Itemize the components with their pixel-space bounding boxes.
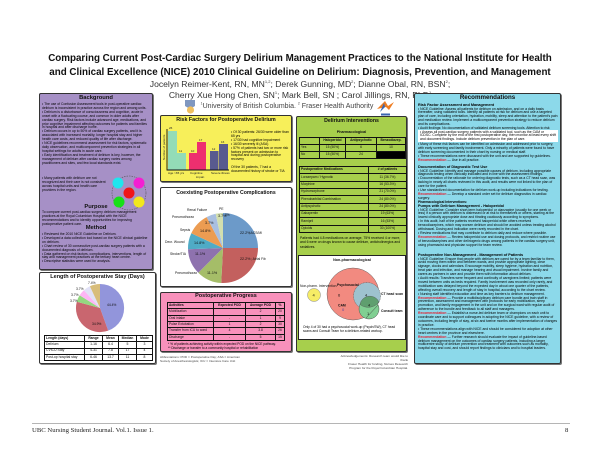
table: postoperative medications: # of patients — [378, 167, 397, 171]
panel: risk factors — [160, 115, 292, 182]
footer rule — [32, 423, 570, 424]
background text: • NICE guidelines recommend assessment for risk factors, systematic daily observation, and multicomponent prevention strategies in all hospital settings for adults in acute care. — [42, 141, 146, 153]
table: pharmacological: 15 (50%) — [326, 145, 339, 149]
panel: length of stay — [39, 272, 156, 364]
pie chart: coexisting complications: 3.7% — [205, 221, 214, 225]
venn note: Only 4 of 30 had a psychosocial work-up (Psych/SW), CT head scans and Consult Team for a delirium-related workup. — [303, 325, 395, 333]
text: assessment findings — [418, 142, 554, 162]
table: pharmacological: No — [301, 152, 305, 156]
text: pharmacological interventions: • In this audit, half of the patients received haloperidol while others received benzodiazepines, which may worsen delirium and should be avoided unless treating alcohol withdrawal. Dosing and indication were rarely recorded in the chart. — [418, 219, 556, 231]
pie chart: coexisting complications: 14.8% — [200, 229, 211, 233]
venn diagram: CAM — [338, 304, 346, 308]
method text: • Data gathered on risk factors, complications, interventions, length of stay and management practices at the tertiary heart centre. — [42, 252, 146, 259]
subheading: documentation: Documentation of Diagnostic Test Use — [418, 165, 487, 169]
bar chart: risk factors: 16 — [221, 140, 225, 144]
table: postoperative medications: Opioids — [301, 226, 312, 230]
table: pharmacological: 24 — [359, 152, 363, 156]
text: risk factor assessment: • NICE Guideline: Assess all patients for delirium on admission, and on a daily basis thereafter, using validated tools. Identify all patients at risk for delirium and use a targeted plan of care, including orientation, hydration, mobility, sleep and attention to the patient's pain and medication review. Implement a multicomponent prevention strategy to reduce delirium and its complications. — [418, 106, 558, 126]
bar chart: risk factors: 17 — [199, 138, 203, 142]
pie chart: length of stay — [70, 281, 124, 332]
progress table note: ** Discharge or transfer to a community hospital or rehabilitation — [168, 346, 258, 350]
pie chart: coexisting complications: PE — [219, 207, 224, 211]
pie chart: coexisting complications: 0% — [225, 213, 230, 217]
panel: postoperative progress — [160, 292, 292, 352]
table: postoperative medications: Lorazepam / Hypnotic — [301, 175, 333, 179]
venn diagram: 4 — [365, 292, 368, 298]
table: postoperative progress — [167, 302, 285, 341]
table: postoperative medications: Antipsychotic — [301, 204, 320, 208]
method text: • Chart review of 30 consecutive post-cardiac surgery patients with a documented diagnosis of delirium. — [42, 244, 145, 252]
heading: method: Method — [86, 225, 106, 231]
footer: journal citation: UBC Nursing Student Journal. Vol.1. Issue 1. — [32, 427, 154, 434]
bar chart: risk factors: 11 — [179, 149, 182, 153]
table: length of stay: 17 — [126, 348, 129, 352]
panel: non-pharmacological — [298, 255, 406, 340]
background text — [42, 102, 147, 165]
text: documentation: • Use standardized documentation for delirium work-up including indications for testing. — [418, 188, 548, 192]
table: length of stay: 5 — [127, 342, 128, 346]
table: length of stay: Length (days) — [46, 336, 68, 340]
panel: coexisting complications — [160, 187, 292, 287]
title: Comparing Current Post-Cardiac Surgery Delirium Management Practices to the National Institute for Health — [48, 53, 552, 64]
pie chart: coexisting complications: Pneumothorax — [175, 271, 197, 275]
pie chart: coexisting complications: Decr. Wound — [165, 240, 185, 244]
bar chart: risk factors: 26 — [169, 126, 173, 130]
table: length of stay: 6-46 — [90, 355, 97, 359]
venn diagram: Non-pharm. Intervention — [300, 284, 337, 288]
risk factors text: Of the 30 patients, 7 had a documented history of stroke or TIA — [231, 165, 285, 173]
risk factors text: • 57% of patients had two or more risk factors present on admission to hospital and during postoperative recovery — [231, 146, 288, 161]
table: postoperative medications: 24 (80.0%) — [379, 204, 396, 208]
table: postoperative medications: Gabapentin — [301, 211, 318, 215]
table: postoperative progress: 2 — [260, 309, 261, 313]
icon: UBC crest — [185, 100, 195, 114]
venn diagram: Psychosocial — [337, 283, 359, 287]
icon: coloured circles diagram — [112, 176, 146, 210]
pie chart: length of stay: 44.4% — [107, 303, 116, 307]
authors: Jocelyn Reimer-Kent, RN, MN1,2; Derek Gunning, MD2; Dianne Obal, RN, BSN2; — [150, 78, 450, 88]
pie chart: coexisting complications: Stroke/TIA — [170, 252, 187, 256]
table: pharmacological: 10 — [389, 145, 393, 149]
table: pharmacological: 6 — [360, 145, 362, 149]
table: postoperative progress: 2 — [260, 322, 261, 326]
authors: Cherry Xue Hong Chen, SN1; Mark Bell, SN ; Carol Jillings, RN, PhD1 — [169, 90, 431, 100]
background text: • Early identification and treatment of delirium is key, however, the management of delirium after cardiac surgery varies among practitioners and sites, and few local standards exist. — [42, 153, 141, 165]
risk factors text: • 17/30 had cognitive impairment — [231, 138, 280, 142]
table: postoperative medications: Phenobarbital Combination — [301, 197, 341, 201]
pie chart: coexisting complications: ; Atrial Fib — [251, 257, 266, 261]
footer: page number: 8 — [565, 427, 568, 434]
table: pharmacological — [299, 137, 406, 159]
pie chart: coexisting complications: Pneumothorax — [172, 215, 194, 219]
table: postoperative progress: Pulse Extubation — [169, 322, 194, 326]
bar chart: risk factors: Cognitive — [190, 171, 203, 175]
pie chart: coexisting complications: 11.1% — [195, 252, 206, 256]
bar chart: risk factors — [163, 126, 230, 179]
table: postoperative progress: 1 — [260, 316, 261, 320]
pie chart: coexisting complications: Renal Failure — [187, 208, 207, 212]
table: length of stay: 1-16 — [90, 342, 97, 346]
table: pharmacological: Haloperidol — [323, 138, 342, 142]
text: non-pharmacological management — [418, 256, 557, 350]
table: postoperative medications: 16 (53.3%) — [379, 182, 396, 186]
table: postoperative progress: 3.8 — [258, 328, 263, 332]
table: postoperative progress: 30 — [278, 322, 282, 326]
text: documentation — [418, 168, 556, 200]
method text: • Descriptive statistics were used for analysis. — [42, 259, 110, 263]
table: postoperative progress: 9 — [279, 316, 281, 320]
heading: recommendations: Recommendations — [460, 94, 515, 101]
pie chart: coexisting complications: 11.1% — [207, 271, 218, 275]
text: pharmacological interventions: • NICE Guideline: Consider short-term haloperidol or olanzapine (usually for one week or less) if a person with delirium is distressed or at risk to themselves or others, starting at the lowest clinically appropriate dose and titrating cautiously according to symptoms. — [418, 208, 554, 219]
table: postoperative progress: Oral intake — [169, 316, 185, 320]
affiliations: 1University of British Columbia. 2 Fraser Health Authority — [201, 102, 373, 110]
table: postoperative medications: 19 (63%) — [381, 211, 394, 215]
heading: coexisting complications: Coexisting Postoperative Complications — [176, 190, 276, 196]
table: postoperative medications: 30 (100%) — [380, 226, 395, 230]
table: postoperative progress: Expected POD — [218, 303, 241, 307]
table: postoperative progress: 15 — [278, 335, 282, 339]
table: length of stay: Mode — [140, 336, 149, 340]
authors — [150, 78, 450, 100]
text: non-pharmacological management: • NICE Guideline: Ensure that people with delirium are cared for by a team familiar to them, avoid moving them within and between wards, and provide appropriate lighting, clear signage, clocks and calendars. Encourage mobility, sleep hygiene, hydration and nutrition, treat pain and infection, and manage hearing and visual impairment. Involve family and carers as partners in care and provide them with information about delirium. — [418, 256, 555, 276]
icon: Fraser Health logo — [377, 101, 394, 116]
text: non-pharmacological management: • These recommendations align with NICE and should be considered for adoption at other heart centres in the province and elsewhere. — [418, 327, 553, 335]
table: postoperative medications: Ramipril — [301, 219, 313, 223]
table: length of stay: Delirium — [46, 342, 58, 346]
table: length of stay: Range — [88, 336, 99, 340]
table: postoperative medications: 21 (70.0%) — [379, 189, 396, 193]
pie chart: coexisting complications: 22.2% — [240, 231, 251, 235]
caption: delirium: Acknowledgements: Research team would like to thank — [341, 354, 408, 362]
table: length of stay: 4-31 — [90, 348, 97, 352]
text: assessment findings: • Many of these risk factors can be identified on admission and addressed prior to surgery, with early screening and family involvement. Only a minority of patients were found to have delirium screening documented in their chart by nursing or medical staff. — [418, 142, 554, 154]
risk factors text — [231, 130, 289, 173]
pie chart: length of stay: 3.7% — [70, 299, 78, 303]
text: non-pharmacological management: Recommendation — Further research should evaluate the impact of guideline-based delirium management on the outcomes of cardiac surgery patients, including a larger multicentre study of delirium prevention and treatment with outcomes such as mortality, hospital stay and cost, and should report findings to clinicians and to hospital leaders. — [418, 335, 549, 350]
heading: delirium interventions: Delirium Interventions — [324, 118, 379, 124]
risk factors text: • 16/30 severely ill (ASA) — [231, 142, 268, 146]
table: postoperative progress: 4 — [229, 328, 230, 332]
table: length of stay: Median — [122, 336, 133, 340]
pie chart: coexisting complications: Sepsis — [180, 228, 190, 232]
table: postoperative progress: Discharge — [169, 335, 184, 339]
background text: • Delirium is a disturbance of consciousness and cognition, acute in onset with a fluctuating course, and common in older adults after cardiac surgery. Risk factors include advanced age, medications, and prior cognitive impairment affecting outcomes for patients and families in hospital and after discharge home. — [42, 110, 147, 129]
pie chart: length of stay: 7.4% — [88, 281, 96, 285]
table: length of stay: 13.7 — [107, 355, 114, 359]
text: assessment findings: • These recommendations were discussed with the unit and are supported by guidelines. Recommendation — Use in all practice. — [418, 154, 551, 162]
panel: delirium interventions — [296, 116, 407, 352]
text: non-pharmacological management: • Nursing staff identified education and time as key barriers to delirium management. — [418, 292, 545, 296]
heading: risk factors: Risk Factors for Postoperative Delirium — [176, 117, 276, 123]
text: pharmacological interventions: • Review medications that may contribute to delirium daily and reduce where possible. — [418, 231, 547, 235]
caption: progress — [160, 355, 240, 363]
heading: purpose: Purpose — [84, 204, 108, 210]
caption: delirium: Fraser Health for funding, Nurses Research — [348, 362, 408, 366]
highlight: screening recommendation: • Assess all post-cardiac surgery patients with a validated tool, such as the CAM or ICDSC. Complete by the end of the first postoperative day, then monitor at least every shift and document findings. Include delirium prevention in the plan of care. — [420, 130, 556, 141]
table: postoperative medications: 24 (80.0%) — [379, 197, 396, 201]
text: documentation: • Documentation of the rationale for ordering diagnostic tests, such as a CT head scan, was lacking in nearly all charts reviewed in this audit, and results were not linked to the plan of care for the patient. — [418, 176, 555, 188]
table: postoperative medications: 11 (36.7%) — [380, 175, 395, 179]
venn diagram: Consult team — [381, 309, 402, 313]
venn diagram: 4 — [368, 302, 371, 308]
table: pharmacological: Yes — [301, 145, 306, 149]
venn diagram: CT head scan — [381, 292, 403, 296]
pie chart: length of stay: 3.7% — [71, 293, 79, 297]
venn diagram — [300, 268, 403, 320]
table: length of stay: 4 — [144, 348, 145, 352]
table: pharmacological: 15 (50%) — [326, 152, 339, 156]
interventions note: Patients had 4.8 medications on average, 75% received 4 or more, and 6 were on drugs known to cause delirium, anticholinergics and sedatives. — [300, 236, 400, 249]
table: length of stay — [44, 335, 153, 361]
table: postoperative progress: Mobilization — [169, 309, 186, 313]
subheading: non-pharmacological management: Postoperative Non-Management - Management of Patients — [418, 253, 523, 257]
table: postoperative medications: 16 (53%) — [381, 219, 394, 223]
table: length of stay: 6.4 — [108, 342, 113, 346]
progress table note: * % of patients achieving activity within expected POD on the NICE pathway. — [168, 342, 276, 346]
pie chart: coexisting complications — [165, 207, 266, 283]
progress table note — [168, 342, 276, 350]
table: length of stay: Mean — [106, 336, 115, 340]
pie chart: length of stay: 34.9% — [92, 322, 101, 326]
table: postoperative progress: 20 — [278, 309, 282, 313]
heading: non-pharmacological: Non-pharmacological — [333, 258, 371, 262]
venn diagram: 4 — [312, 292, 316, 298]
text: documentation: Recommendation — Develop a standard order set for delirium diagnostics in cardiac surgery. — [418, 192, 547, 200]
table: postoperative progress: - — [229, 335, 230, 339]
pie chart: coexisting complications: ; ACS/MI — [249, 231, 262, 235]
heading: postoperative progress: Postoperative Progress — [195, 293, 257, 299]
table: postoperative progress: 26 — [278, 328, 282, 332]
heading: length of stay: Length of Postoperative Stay (Days) — [50, 274, 145, 280]
bar chart: risk factors: 10 — [191, 149, 195, 153]
method text: • Reviewed the 2010 NICE Guideline on Delirium. — [42, 232, 116, 236]
table: postoperative progress: 1 — [229, 322, 230, 326]
text: non-pharmacological management: Recommendation — Provide a multidisciplinary delirium care bundle and train staff in prevention, assessment and management with protocols for early mobilization, sleep promotion, and family engagement in the unit and on the surgical ward with regular audit of adherence to the bundle and feedback to all staff and managers. — [418, 296, 554, 311]
caption: progress: Abbreviations: POD = Postoperative Day; ASA = American — [160, 355, 240, 359]
method text — [42, 232, 148, 263]
panel: background — [39, 93, 153, 270]
title — [48, 53, 552, 78]
text: pharmacological interventions — [418, 208, 556, 247]
table: length of stay: 11 — [126, 355, 129, 359]
table: postoperative progress: Transfer from ICU to ward — [169, 328, 207, 332]
heading: background: Background — [79, 95, 113, 101]
text: non-pharmacological management: Recommendation — Establish a nurse-led delirium team or champions on each unit to coordinate care and to support colleagues in adopting the NICE guideline, with a review of outcomes, including length of stay, at six and twelve months after implementation of changes in practice. — [418, 311, 557, 327]
table: postoperative progress: Activities — [169, 303, 184, 307]
text: documentation: • NICE Guideline: Identify and manage possible causes of delirium, including appropriate diagnostic testing when clinically indicated and in line with the assessment findings. — [418, 168, 551, 176]
bar chart: risk factors: impair. — [196, 175, 205, 179]
pie chart: length of stay: 3.7% — [76, 287, 84, 291]
venn diagram: 6 — [338, 292, 341, 298]
caption: progress: Society of Anesthesiologists; ICU = Intensive Care Unit — [160, 359, 235, 363]
background text beside diagram: • Many patients with delirium are not recognized and their care is not consistent across hospital units and health care providers in the region. — [42, 176, 106, 192]
background text: • Delirium occurs in up to 50% of cardiac surgery patients, and it is associated with increased mortality, longer hospital stay and higher health care costs, and reduced quality of life after discharge. — [42, 129, 142, 141]
bar chart: risk factors: Severe illness — [211, 171, 230, 175]
table: length of stay: Post-op hospital stay — [46, 355, 77, 359]
table: postoperative progress: % — [279, 303, 281, 307]
pie chart: coexisting complications: 22.2% — [240, 257, 251, 261]
method text: • Developed a data collection tool based on the NICE clinical guideline on delirium. — [42, 236, 147, 244]
table: length of stay: 3 — [144, 342, 145, 346]
subheading: risk factor assessment: Risk Factor Assessment and Management — [418, 103, 494, 107]
text: non-pharmacological management: • Audit results: Transfers were frequent and continuity of caregivers limited; patients were moved between units as beds required. Family involvement was recorded only rarely, and mobilization was delayed beyond the expected day in about one quarter of the patients, affecting overall recovery and length of stay in hospital, according to the chart review. — [418, 276, 552, 292]
table: postoperative medications: Hydromorphone — [301, 189, 325, 193]
venn diagram: 1 — [367, 311, 370, 316]
table: postoperative medications: Morphine — [301, 182, 315, 186]
pie chart: coexisting complications: 14.8% — [194, 241, 205, 245]
subheading: pharmacological: Pharmacological — [337, 130, 366, 134]
table: length of stay: 7.8 — [108, 348, 113, 352]
background text: • The use of Confusion Assessment tools in post-operative cardiac delirium is inconsistent in practice across the region and among units. — [42, 102, 146, 110]
table: pharmacological: Antipsychotic — [350, 138, 372, 142]
purpose text: To compare current post-cardiac surgery delirium management practices at the Royal Columbian Hospital with the NICE recommendations and to identify opportunities for improving postoperative patient care. — [42, 210, 136, 226]
bar chart: risk factors: Age >65 yrs — [168, 171, 185, 175]
table: postoperative progress: - — [229, 316, 230, 320]
table: postoperative progress: 5 — [260, 335, 261, 339]
risk factors text: • Of 30 patients: 26/30 were older than 65 yrs — [231, 130, 289, 138]
title: and Clinical Excellence (NICE) 2010 Clinical Guideline on Delirium: Diagnosis, Prevention, and Management — [49, 66, 551, 78]
table: pharmacological: Benzodiazep. — [380, 138, 402, 142]
panel: recommendations — [414, 93, 561, 364]
pie chart: coexisting complications: 3.7% — [218, 214, 227, 218]
venn diagram: 0 — [342, 307, 345, 312]
text: pharmacological interventions: Recommendation — Review haloperidol use and dosing protocols, and restrict routine use of benzodiazepines and other deliriogenic drugs among patients in the cardiac surgery unit, using pharmacist and physician support for team review. — [418, 235, 555, 247]
caption: delirium — [340, 354, 408, 370]
table: length of stay: CVICU Stay — [46, 348, 64, 352]
table: postoperative medications: Postoperative Medications — [301, 167, 343, 171]
caption: delirium: Program for the Royal Columbian Hospital. — [349, 366, 408, 370]
table: postoperative medications — [299, 166, 407, 233]
table: length of stay: 8 — [144, 355, 145, 359]
text: risk factor assessment: • Audit findings: No documentation of validated delirium screening tools. Attention to risk factors in practice is inconsistent across the unit and wards. — [418, 126, 550, 134]
bar chart: risk factors: 12 — [212, 147, 216, 151]
subheading: pharmacological interventions: Pharmacological Interventions: — [418, 200, 467, 204]
subheading: pumps: Pumps with Delirium Management - Haloperidol — [418, 204, 504, 208]
table: postoperative progress: Average POD — [250, 303, 271, 307]
